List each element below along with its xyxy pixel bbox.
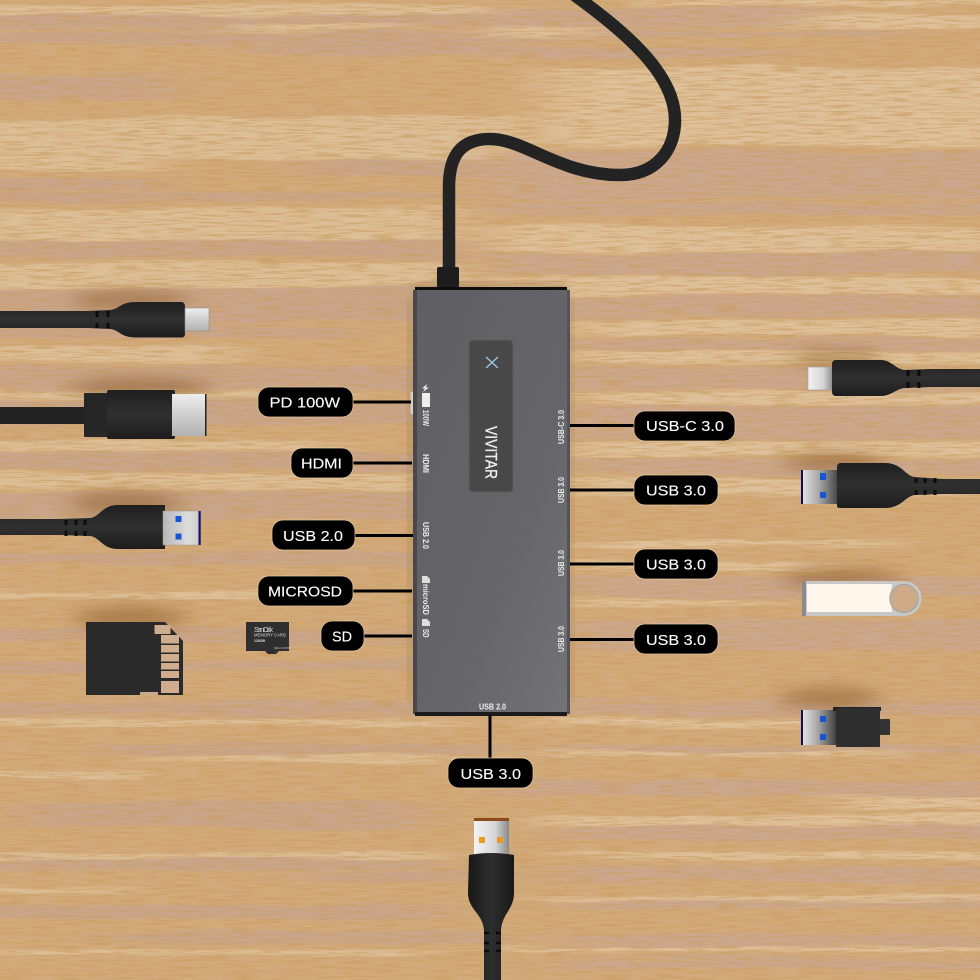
left connector: HDMI cable <box>0 390 206 439</box>
bottom port label: USB 2.0 <box>479 702 506 712</box>
hub cable <box>437 0 675 288</box>
pill: USB 3.0 upper <box>634 475 718 505</box>
left connector: USB 3.0 cable <box>0 505 201 549</box>
left port labels <box>421 384 431 638</box>
pill: SD <box>321 621 364 651</box>
pill: USB 2.0: USB 2.0 <box>283 528 343 545</box>
right connector: USB-C cable <box>808 360 980 396</box>
pill: USB-C 3.0: USB-C 3.0 <box>646 418 724 435</box>
right port labels: USB 3.0 <box>556 626 566 652</box>
SD card <box>86 622 183 695</box>
microSD card: San Disk <box>254 625 273 634</box>
USB flash drive <box>802 581 922 616</box>
pill: USB 2.0 <box>272 520 355 550</box>
bands right <box>490 8 980 970</box>
right port labels <box>556 410 566 652</box>
blue contacts <box>820 716 826 722</box>
bottom connector: USB cable <box>468 818 514 980</box>
brand name: VIVITAR <box>482 426 500 479</box>
icon: bolt <box>422 384 429 392</box>
icon: SD card <box>422 619 430 626</box>
contact shadows <box>70 282 900 709</box>
left connector: USB-C cable <box>0 302 209 338</box>
bands left <box>0 15 560 942</box>
hub body <box>410 287 570 716</box>
microSD card <box>246 622 290 654</box>
blue contacts <box>820 473 826 480</box>
microSD card: SD-C 4XXX <box>274 646 290 650</box>
left port labels: 100W <box>421 410 431 427</box>
left port labels: microSD <box>421 584 431 615</box>
strain relief <box>437 267 459 288</box>
pill: USB 3.0 bottom: USB 3.0 <box>460 766 521 783</box>
pill: SD: SD <box>332 628 352 646</box>
USB dongle <box>801 707 890 747</box>
left port labels: HDMI <box>421 454 431 473</box>
callout lines <box>352 402 635 759</box>
pill: USB 3.0 middle: USB 3.0 <box>646 556 706 574</box>
right port labels: USB-C 3.0 <box>556 410 566 444</box>
pill: USB 3.0 upper: USB 3.0 <box>646 482 706 500</box>
pill: USB 3.0 lower: USB 3.0 <box>646 632 706 649</box>
brand panel <box>469 340 513 492</box>
icon: logo X <box>486 357 498 368</box>
pill: HDMI: HDMI <box>301 456 342 472</box>
right port labels: USB 3.0 <box>556 477 566 503</box>
icon: microSD card <box>422 576 430 583</box>
pill: MICROSD: MICROSD <box>268 584 342 600</box>
microSD card: MEMORY CARD <box>254 632 287 638</box>
pill: USB 3.0 middle <box>634 549 718 579</box>
microSD card: 128GB <box>254 639 266 643</box>
left port labels: SD <box>421 629 431 638</box>
pill: USB-C 3.0 <box>634 411 735 441</box>
blue contacts <box>176 516 182 522</box>
right connector: USB 3.0 cable <box>801 463 980 508</box>
left port labels: USB 2.0 <box>421 522 431 549</box>
pill: PD 100W <box>258 387 353 417</box>
orange contacts <box>479 837 485 843</box>
pill: USB 3.0 lower <box>634 624 718 654</box>
right port labels: USB 3.0 <box>556 550 566 576</box>
pill: USB 3.0 bottom <box>448 758 533 788</box>
pill: PD 100W: PD 100W <box>270 394 341 412</box>
pill: HDMI <box>291 448 353 478</box>
icon: battery <box>422 393 430 407</box>
pill: MICROSD <box>258 576 353 606</box>
